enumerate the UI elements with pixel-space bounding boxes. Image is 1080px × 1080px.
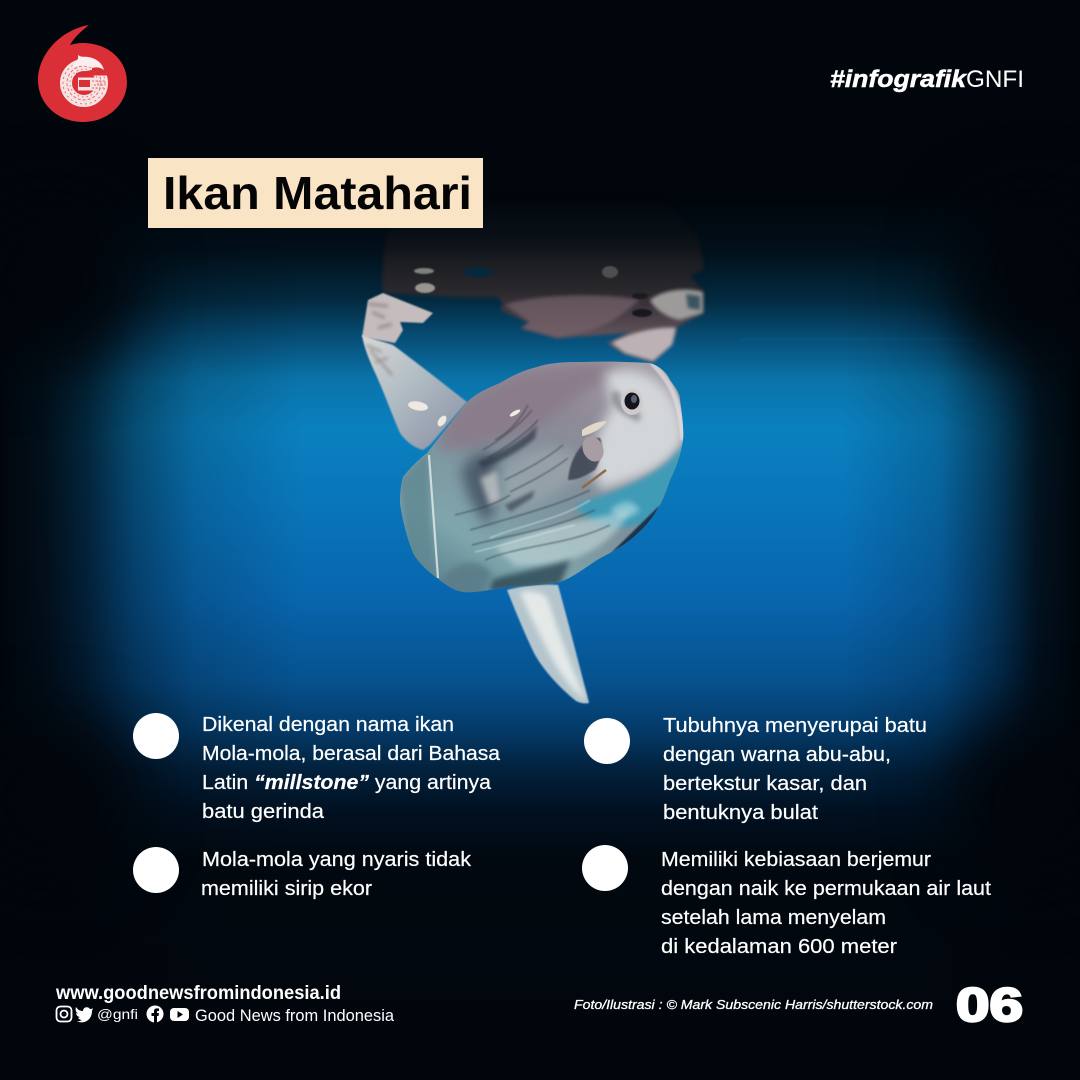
footer: website: www.goodnewsfromindonesia.id (55, 983, 341, 1004)
footer: handle: @gnfi (97, 1006, 138, 1022)
text: berjemur: dengan naik ke permukaan air laut (661, 878, 991, 900)
text: sirip ekor: Mola-mola yang nyaris tidak (202, 849, 472, 871)
text: Dikenal (202, 714, 501, 823)
striations (455, 405, 610, 560)
bullet 4 (582, 845, 991, 958)
fish: body (395, 355, 690, 598)
text: Tubuhnya: bertekstur kasar, dan (663, 773, 867, 795)
logo: G ring (63, 62, 112, 104)
text: berjemur (661, 849, 991, 958)
left clavus panel (400, 454, 432, 574)
bullet 2 (133, 847, 472, 900)
logo: GNFI red emblem (38, 25, 127, 122)
fish: lower fin (507, 585, 589, 703)
title box (148, 158, 483, 228)
hashtag (830, 66, 1024, 93)
bullet 3 (584, 715, 927, 824)
text: berjemur: di kedalaman 600 meter (661, 936, 897, 958)
title: Ikan Matahari (163, 167, 472, 219)
icon: twitter (76, 1007, 93, 1022)
hashtag: #infografik (830, 66, 968, 93)
text: Dikenal: Dikenal dengan nama ikan (202, 714, 454, 736)
text: Dikenal: Latin “millstone” yang artinya (202, 772, 492, 794)
footer: channel name: Good News from Indonesia (195, 1006, 395, 1025)
footer: social icons (56, 1006, 189, 1023)
fish: eye (621, 389, 643, 415)
bullet 1 (133, 713, 501, 823)
surface reflection of the fish (362, 175, 703, 362)
icon: youtube (170, 1008, 189, 1021)
text: Tubuhnya: dengan warna abu-abu, (663, 744, 891, 766)
mid dark folds (462, 453, 497, 525)
head light (593, 370, 684, 490)
text: Tubuhnya (663, 715, 927, 824)
fish: skin patches on fin (407, 400, 521, 428)
hashtag: GNFI (966, 66, 1024, 93)
text: berjemur: setelah lama menyelam (661, 907, 886, 929)
icon: facebook (146, 1006, 164, 1023)
belly teal (575, 440, 686, 527)
lower pale streaks (495, 510, 630, 566)
text: Dikenal: batu gerinda (202, 801, 325, 823)
text: sirip ekor (201, 849, 472, 900)
fish: upper fin (362, 335, 467, 450)
dorsal purple back (440, 362, 625, 450)
text: Tubuhnya: bentuknya bulat (663, 802, 818, 824)
underside shadow (612, 505, 660, 552)
text: berjemur: Memiliki kebiasaan berjemur (661, 849, 931, 871)
text: Tubuhnya: Tubuhnya menyerupai batu (663, 715, 927, 737)
text: Dikenal: Mola-mola, berasal dari Bahasa (202, 743, 501, 765)
photo credit: Foto/Ilustrasi : © Mark Subscenic Harris/shutterstock.com (574, 997, 933, 1012)
text: sirip ekor: memiliki sirip ekor (201, 878, 372, 900)
logo: eagle head (70, 55, 104, 70)
fish: pectoral fin (568, 421, 608, 488)
page number: 06 (956, 978, 1023, 1031)
icon: instagram (56, 1006, 72, 1022)
